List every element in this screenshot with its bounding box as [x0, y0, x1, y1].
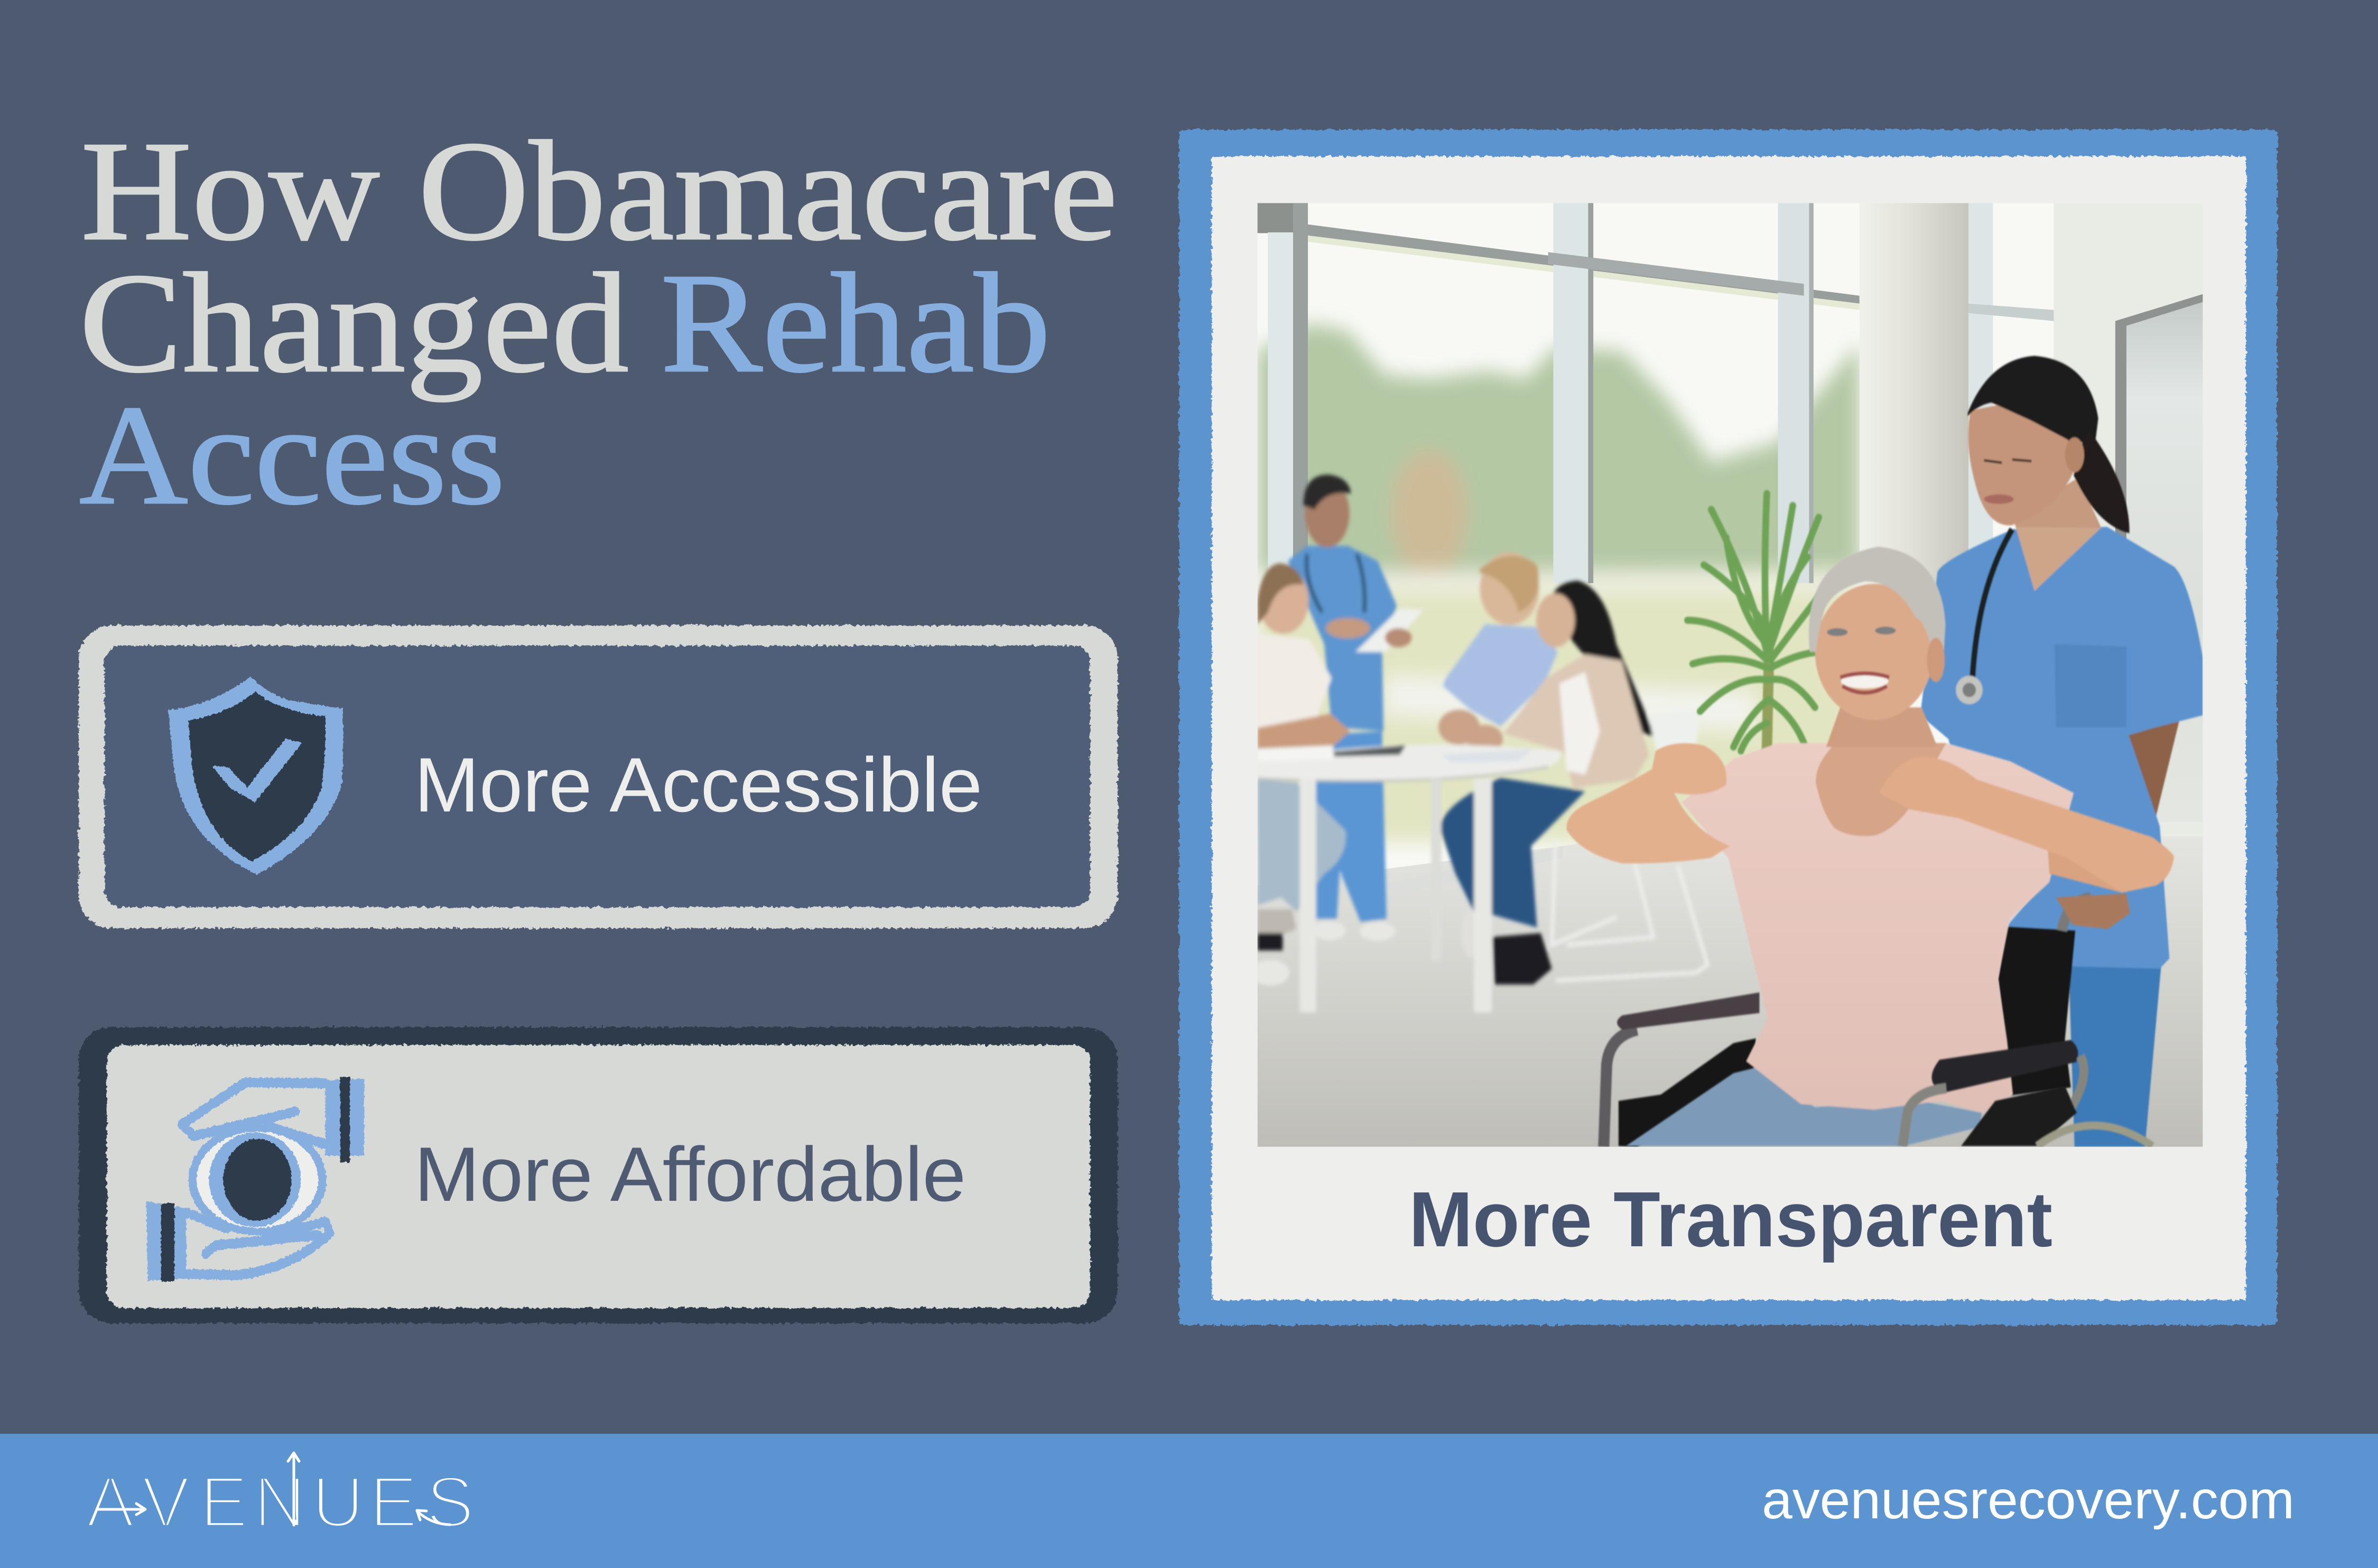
concrete column [1860, 203, 1968, 591]
wheelchair seat and left frame [1604, 993, 1759, 1147]
footer bar [0, 1434, 2378, 1568]
logo: avenues: AVENUES [86, 1462, 474, 1543]
wheelchair back [1998, 893, 2130, 1095]
panel: more accessible [79, 626, 1118, 928]
title: How Obamacare [81, 112, 1118, 270]
icon: hands holding coin [146, 1077, 364, 1282]
blonde woman [1443, 624, 1558, 726]
seated patient [1566, 547, 2174, 1146]
potted plant [1687, 493, 1823, 751]
wheelchair right armrest and wheel [1902, 1040, 2152, 1146]
floor [1258, 802, 2203, 1147]
title: Changed [79, 244, 629, 402]
photo: rehab clinic scene [1251, 203, 2203, 1147]
label: more accessible: More Accessible [414, 742, 982, 828]
dark haired woman [1549, 581, 1655, 736]
wall and door [2054, 203, 2203, 836]
panel: more affordable [79, 1027, 1118, 1323]
table [1258, 745, 1561, 781]
standing nurse [1315, 731, 1387, 922]
icon: shield with check [169, 677, 343, 874]
window base [1378, 846, 1563, 898]
title: Rehab [661, 244, 1051, 402]
chair [1648, 709, 1700, 763]
label: more transparent: More Transparent [1409, 1176, 2052, 1263]
label: more affordable: More Affordable [414, 1131, 966, 1217]
panel: more transparent photo card [1179, 129, 2277, 1325]
standing therapist [1920, 356, 2203, 1147]
seated woman left [1258, 779, 1346, 912]
background people [1251, 474, 1707, 1012]
window frames [1258, 203, 1860, 583]
website url: avenuesrecovery.com [1762, 1470, 2295, 1530]
title [79, 112, 1118, 534]
logo arrows [97, 1453, 450, 1525]
title: Access [79, 376, 505, 534]
